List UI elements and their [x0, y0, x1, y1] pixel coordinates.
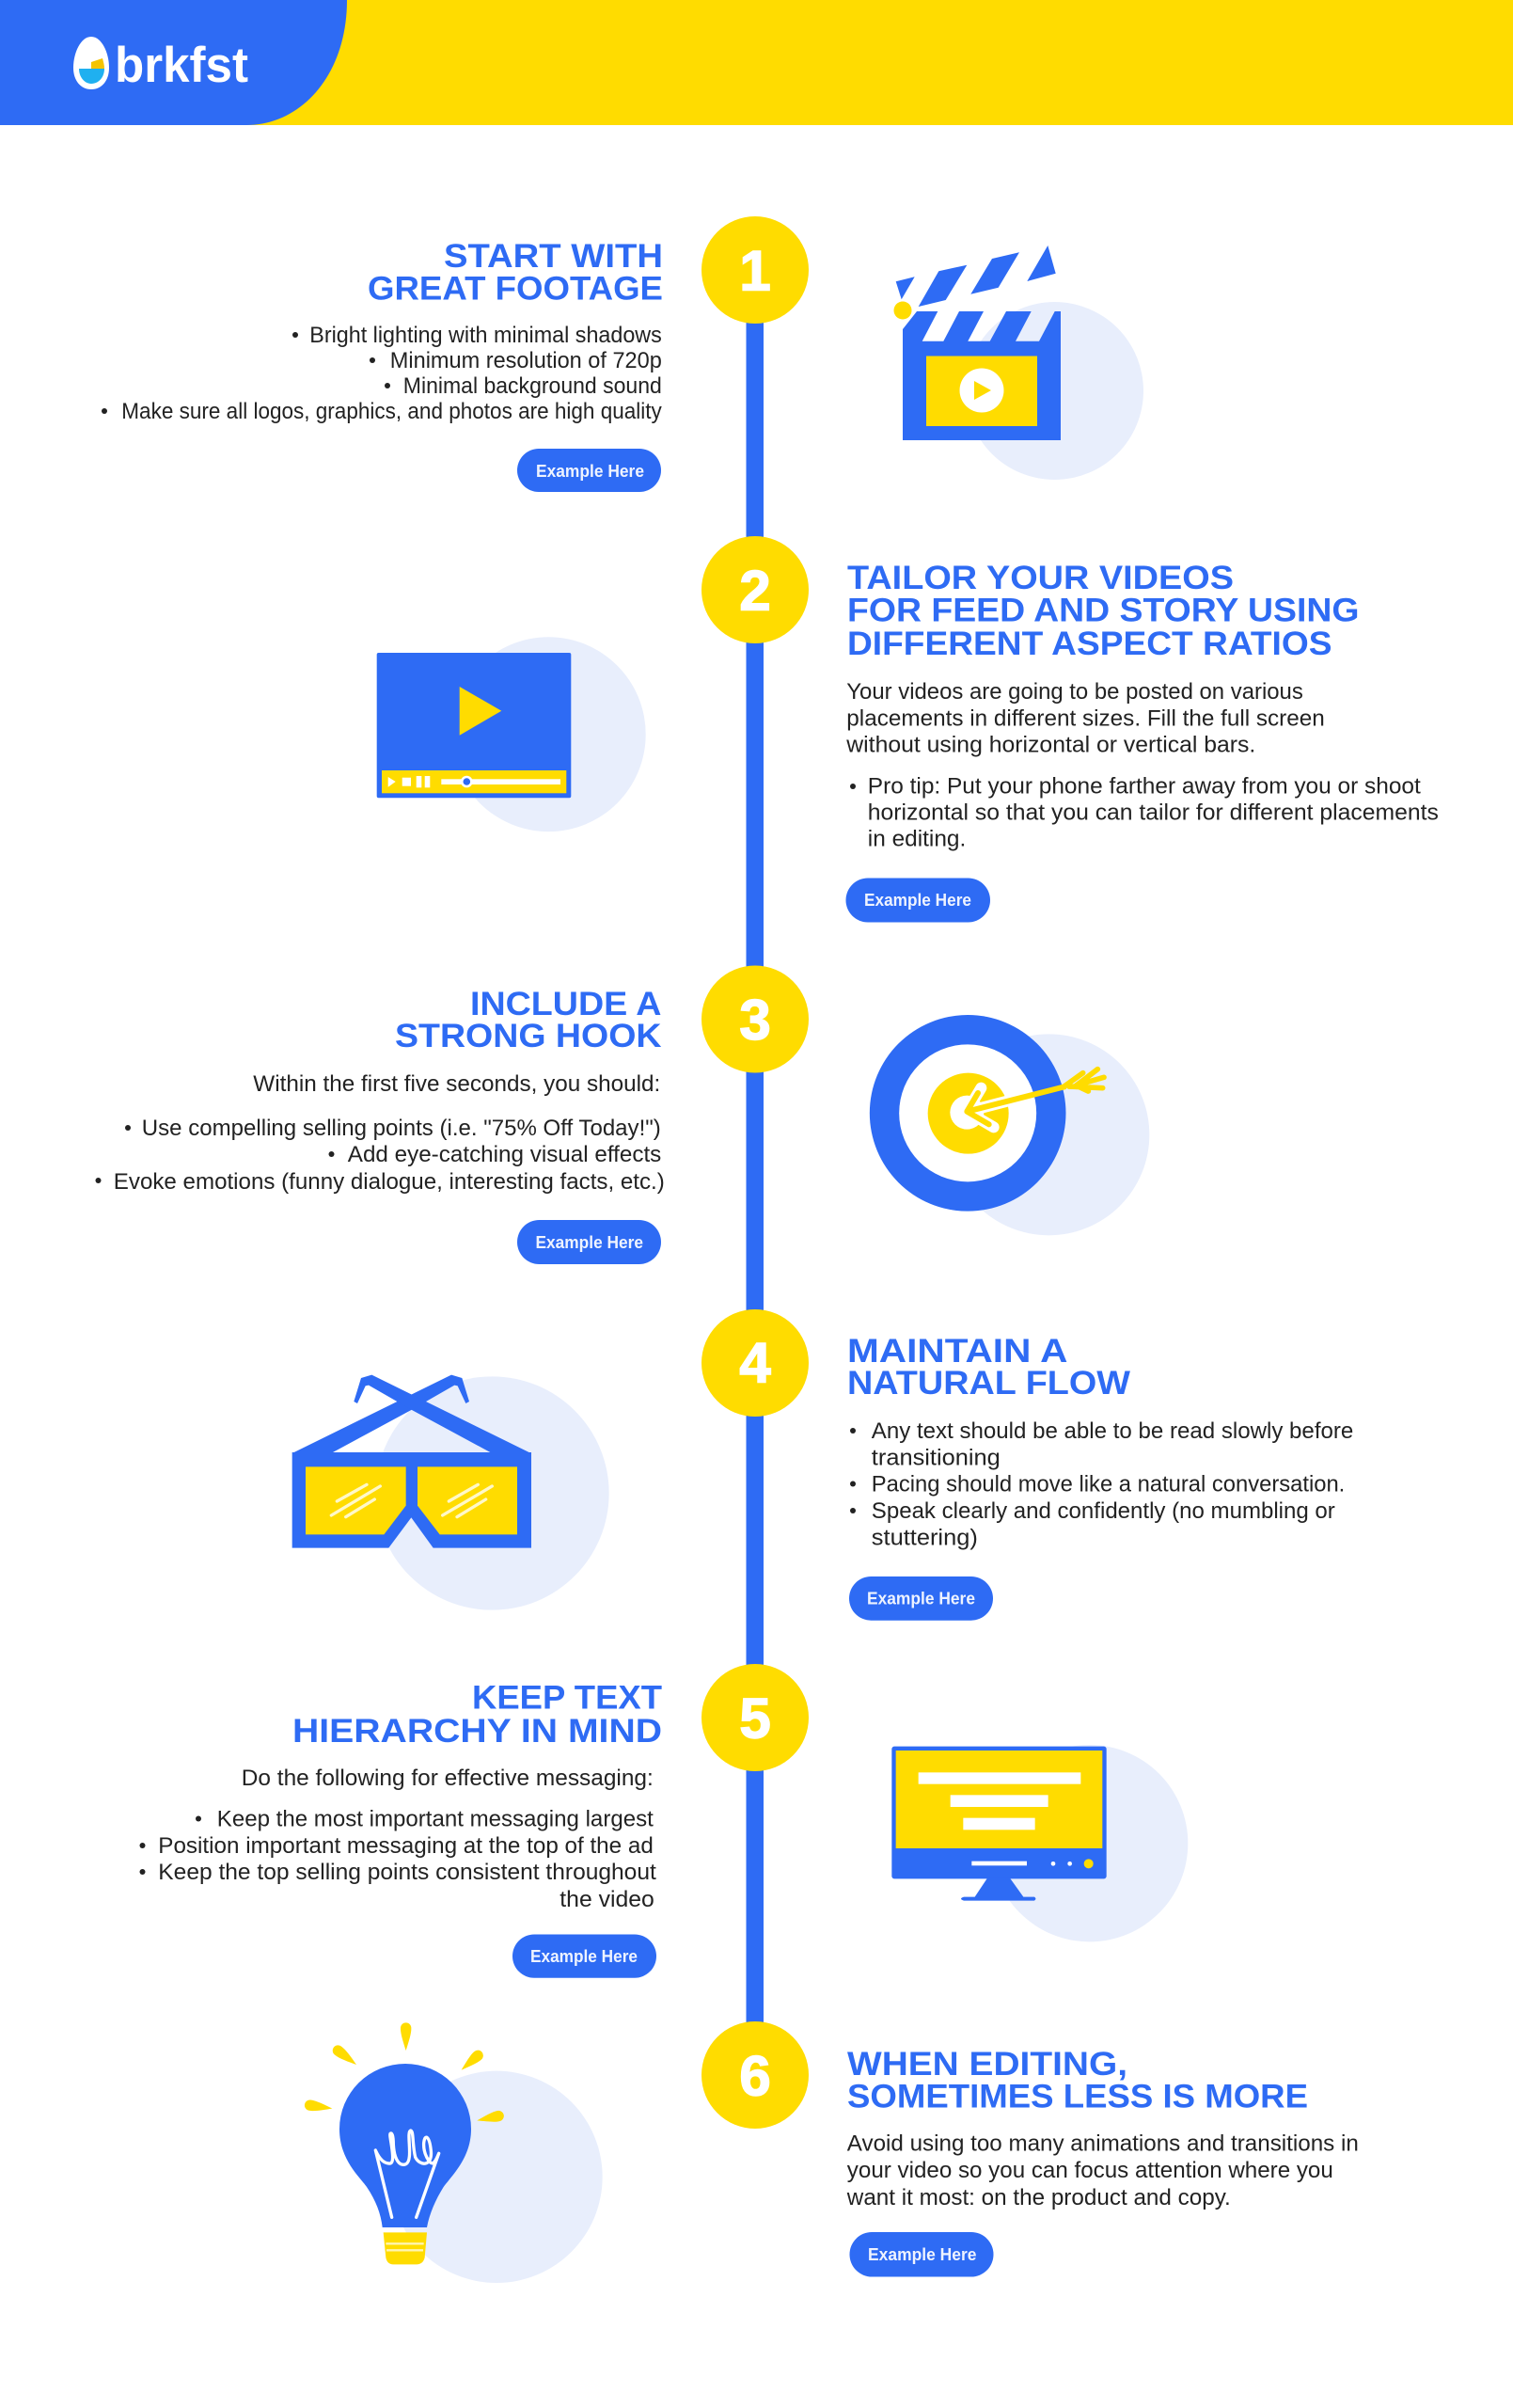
heading: start with great footage: START WITH [444, 238, 663, 275]
panel: step 5 keep text hierarchy in mind [139, 1680, 1188, 1978]
icon: light bulb [304, 2022, 603, 2283]
button: example here [846, 879, 990, 922]
bullet list: pacing: transitioning [872, 1445, 1001, 1471]
heading: keep text hierarchy in mind [292, 1680, 662, 1750]
button: example here [517, 449, 661, 492]
button: example here [517, 1220, 661, 1264]
paragraph: placements: placements in different sizes. Fill the full screen [846, 705, 1325, 732]
bullet list: footage requirements: Minimum resolution of 720p [390, 348, 662, 373]
icon: desktop monitor [891, 1745, 1188, 1941]
paragraph: placements [845, 679, 1325, 758]
bullet list: pacing: stuttering) [872, 1526, 978, 1550]
number circle 1: 1 [739, 239, 771, 303]
paragraph: avoid animations: Avoid using too many animations and transitions in [847, 2131, 1359, 2156]
heading: keep text hierarchy in mind: KEEP TEXT [472, 1680, 662, 1716]
heading: include a strong hook: INCLUDE A [470, 986, 662, 1022]
header banner [0, 0, 1513, 125]
bullet list: messaging: the video [559, 1887, 654, 1912]
number circle 1 [701, 216, 809, 324]
bullet list: footage requirements: Minimal background sound [403, 373, 662, 399]
heading: maintain a natural flow [847, 1333, 1130, 1402]
paragraph: placements: Your videos are going to be posted on various [846, 679, 1303, 705]
button: example here [512, 1934, 656, 1978]
heading: tailor your videos [847, 560, 1360, 662]
bullet list: messaging: Keep the most important messaging largest [217, 1806, 654, 1832]
bullet list: footage requirements: Make sure all logos, graphics, and photos are high quality [121, 399, 662, 424]
button: example here [849, 1576, 993, 1621]
heading: maintain a natural flow: MAINTAIN A [847, 1333, 1068, 1370]
bullet list: hook tactics: Evoke emotions (funny dialogue, interesting facts, etc.) [114, 1169, 665, 1195]
button: example here: Example Here [864, 891, 971, 910]
button: example here: Example Here [536, 1233, 643, 1252]
heading: include a strong hook: STRONG HOOK [395, 1018, 662, 1054]
heading: start with great footage: GREAT FOOTAGE [368, 271, 663, 307]
heading: keep text hierarchy in mind: HIERARCHY IN MIND [292, 1713, 662, 1750]
button: example here: Example Here [530, 1947, 638, 1966]
heading: start with great footage [368, 238, 663, 307]
bullet list: messaging [139, 1806, 656, 1912]
bullet list: pacing [850, 1418, 1353, 1550]
button: example here: Example Here [536, 462, 644, 481]
bullet: pro tip: horizontal so that you can tailor for different placements [868, 800, 1439, 826]
icon: 3D glasses [292, 1375, 609, 1610]
bullet: pro tip [850, 773, 1439, 852]
bullet list: hook tactics [96, 1116, 665, 1195]
number circle 4 [701, 1309, 809, 1417]
bullet list: messaging: Position important messaging at the top of the ad [158, 1833, 654, 1859]
number circle 3: 3 [739, 989, 771, 1052]
logo: brkfst: brkfst [115, 38, 248, 93]
button: example here [850, 2232, 993, 2276]
icon: target with arrow [870, 1015, 1149, 1235]
heading: when editing sometimes less is more: WHEN EDITING, [847, 2046, 1127, 2083]
bullet list: pacing: Speak clearly and confidently (no mumbling or [872, 1498, 1335, 1524]
heading: include a strong hook [395, 986, 662, 1054]
panel: step 2 tailor your videos [377, 560, 1439, 922]
paragraph: avoid animations: want it most: on the product and copy. [846, 2185, 1231, 2210]
heading: tailor your videos: DIFFERENT ASPECT RATIOS [847, 626, 1332, 662]
bullet list: hook tactics: Add eye-catching visual effects [348, 1142, 661, 1167]
panel: step 6 when editing [304, 2022, 1359, 2283]
panel: step 3 include a strong hook [96, 986, 1149, 1264]
number circle 6: 6 [739, 2045, 771, 2107]
timeline line [747, 270, 764, 2074]
number circle 5: 5 [739, 1687, 771, 1750]
panel: step 1 start with great footage [102, 238, 1143, 492]
number circle 2: 2 [739, 559, 771, 623]
icon: clapperboard [893, 246, 1143, 480]
number circle 5 [701, 1664, 809, 1771]
button: example here: Example Here [868, 2245, 976, 2264]
icon: video player [377, 637, 646, 832]
paragraph: avoid animations [846, 2131, 1359, 2210]
bullet list: pacing: Pacing should move like a natural conversation. [872, 1471, 1345, 1497]
paragraph: placements: without using horizontal or vertical bars. [845, 732, 1255, 758]
bullet list: messaging: Keep the top selling points consistent throughout [158, 1860, 656, 1885]
heading: tailor your videos: TAILOR YOUR VIDEOS [847, 560, 1234, 596]
number circle 2 [701, 536, 809, 643]
heading: when editing sometimes less is more: SOMETIMES LESS IS MORE [847, 2079, 1308, 2115]
bullet list: pacing: Any text should be able to be read slowly before [872, 1418, 1353, 1444]
bullet list: hook tactics: Use compelling selling points (i.e. "75% Off Today!") [142, 1116, 661, 1141]
bullet: pro tip: in editing. [868, 826, 966, 852]
bullet: pro tip: Pro tip: Put your phone farther away from you or shoot [868, 773, 1421, 800]
number circle 4: 4 [739, 1332, 771, 1394]
intro text: Do the following for effective messaging: [242, 1766, 654, 1791]
intro text: Within the first five seconds, you should: [253, 1071, 660, 1097]
heading: tailor your videos: FOR FEED AND STORY USING [847, 593, 1360, 628]
panel: step 4 maintain a natural flow [292, 1333, 1353, 1621]
paragraph: avoid animations: your video so you can focus attention where you [847, 2158, 1333, 2183]
bullet list: footage requirements: Bright lighting with minimal shadows [309, 323, 662, 348]
button: example here: Example Here [867, 1590, 975, 1608]
bullet list: footage requirements [102, 323, 662, 424]
heading: when editing sometimes less is more [847, 2046, 1308, 2115]
heading: maintain a natural flow: NATURAL FLOW [847, 1365, 1130, 1402]
number circle 3 [701, 965, 809, 1072]
number circle 6 [701, 2021, 809, 2129]
